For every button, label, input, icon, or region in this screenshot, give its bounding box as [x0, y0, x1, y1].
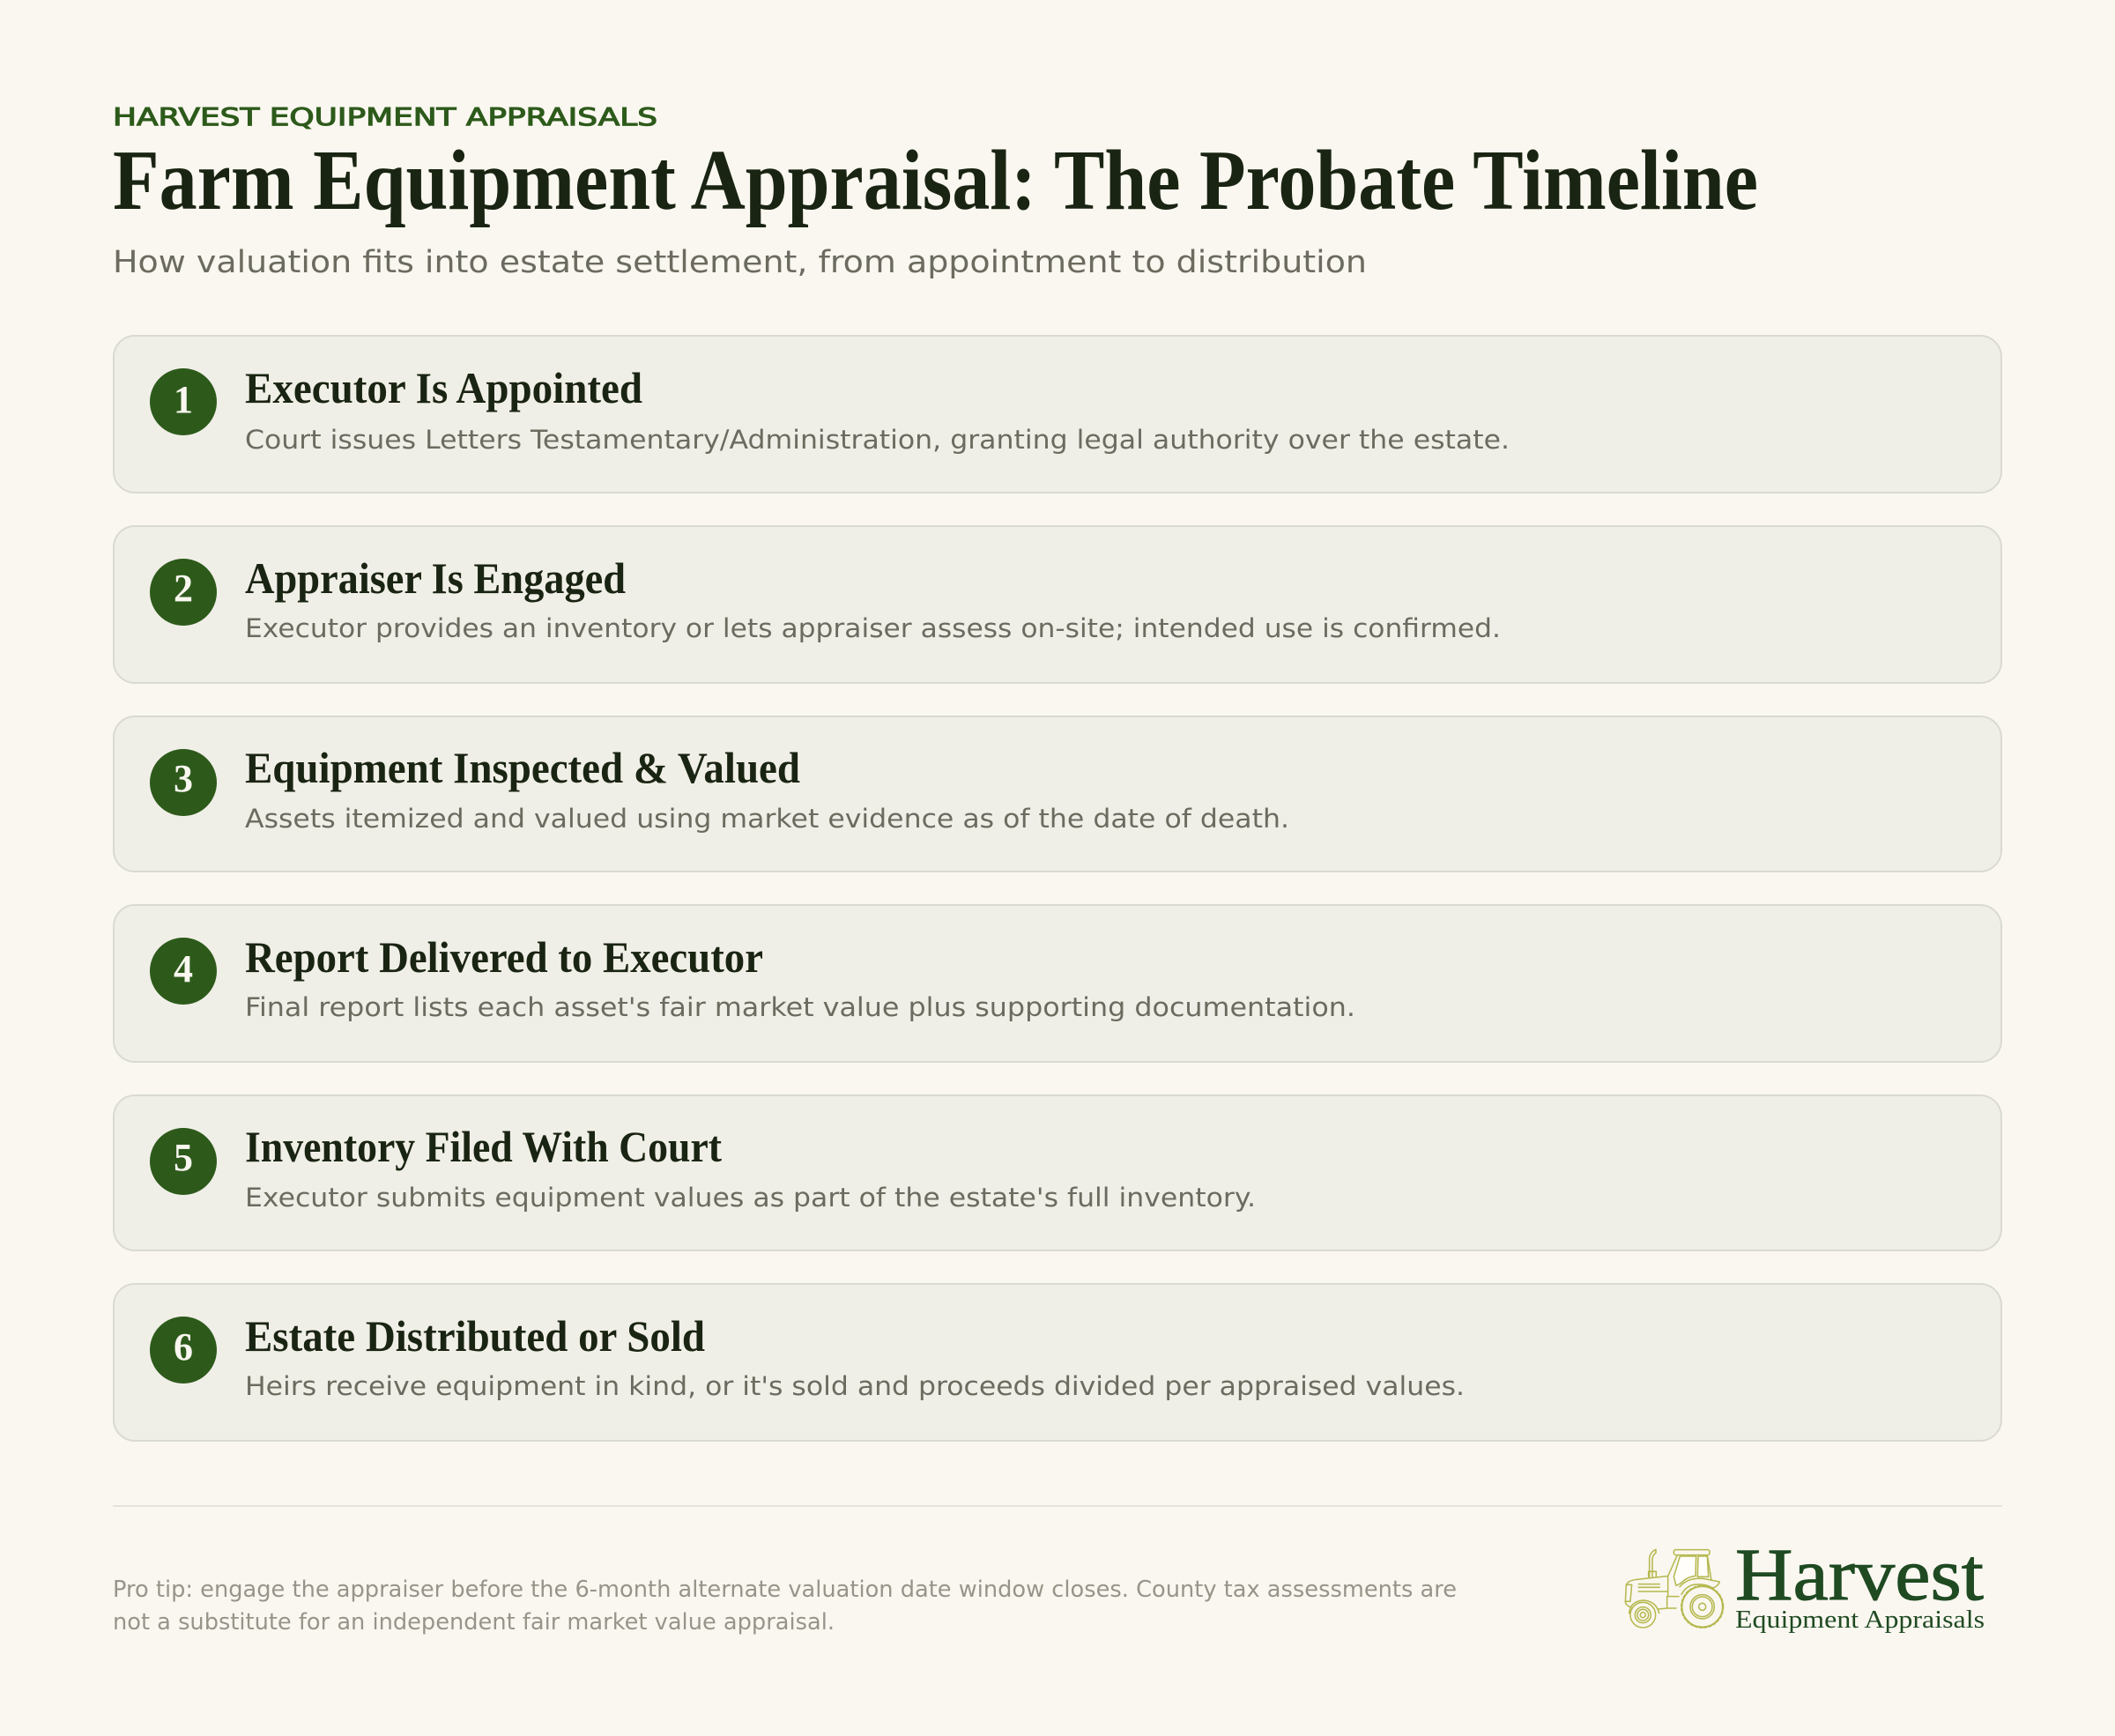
- step 1 number badge: [150, 368, 217, 435]
- step 3 heading: Equipment Inspected & Valued: [245, 743, 800, 792]
- panel: step 5: [114, 1095, 2001, 1250]
- step 5 number badge: 5: [174, 1136, 193, 1179]
- panel: step 4: [114, 905, 2001, 1062]
- title: Farm Equipment Appraisal: The Probate Timeline: [113, 133, 1758, 228]
- step 6 number badge: 6: [174, 1325, 193, 1369]
- eyebrow: HARVEST EQUIPMENT APPRAISALS: [113, 103, 657, 131]
- step 5 number badge: [150, 1128, 217, 1195]
- panel: step 1: [114, 336, 2001, 493]
- step 6 description: Heirs receive equipment in kind, or it's sold and proceeds divided per appraised values.: [245, 1371, 1465, 1401]
- step 4 description: Final report lists each asset's fair market value plus supporting documentation.: [245, 992, 1355, 1022]
- step 4 number badge: [150, 938, 217, 1005]
- step 5 heading: Inventory Filed With Court: [245, 1122, 722, 1171]
- step 1 heading: Executor Is Appointed: [245, 363, 642, 412]
- subtitle: How valuation fits into estate settlement, from appointment to distribution: [113, 245, 1367, 280]
- panel: step 3: [114, 716, 2001, 872]
- panel: step 6: [114, 1284, 2001, 1441]
- step 5 description: Executor submits equipment values as part of the estate's full inventory.: [245, 1183, 1256, 1213]
- icon: tractor: [1625, 1549, 1723, 1628]
- step 1 number badge: 1: [174, 378, 193, 421]
- step 3 number badge: [150, 749, 217, 816]
- footer pro tip: Pro tip: engage the appraiser before the 6-month alternate valuation date window closes. County tax assessments are: [113, 1576, 1457, 1603]
- step 2 number badge: 2: [174, 567, 193, 610]
- step 3 number badge: 3: [174, 757, 193, 800]
- header: [113, 103, 1758, 280]
- wordmark: Equipment Appraisals: Equipment Appraisals: [1735, 1606, 1985, 1634]
- footer pro tip: [113, 1576, 1457, 1636]
- step 3 description: Assets itemized and valued using market evidence as of the date of death.: [245, 804, 1289, 834]
- step 6 heading: Estate Distributed or Sold: [245, 1311, 705, 1361]
- footer pro tip: not a substitute for an independent fair market value appraisal.: [113, 1609, 835, 1636]
- step 2 number badge: [150, 559, 217, 626]
- wordmark: Harvest: Harvest: [1735, 1533, 1984, 1616]
- logo: [1625, 1533, 1985, 1634]
- step 4 heading: Report Delivered to Executor: [245, 932, 763, 982]
- step 1 description: Court issues Letters Testamentary/Administration, granting legal authority over the estate.: [245, 425, 1510, 455]
- step 2 description: Executor provides an inventory or lets appraiser assess on-site; intended use is confirmed.: [245, 613, 1501, 643]
- step 4 number badge: 4: [174, 947, 193, 990]
- panel: step 2: [114, 526, 2001, 683]
- step 6 number badge: [150, 1317, 217, 1384]
- step 2 heading: Appraiser Is Engaged: [245, 553, 626, 603]
